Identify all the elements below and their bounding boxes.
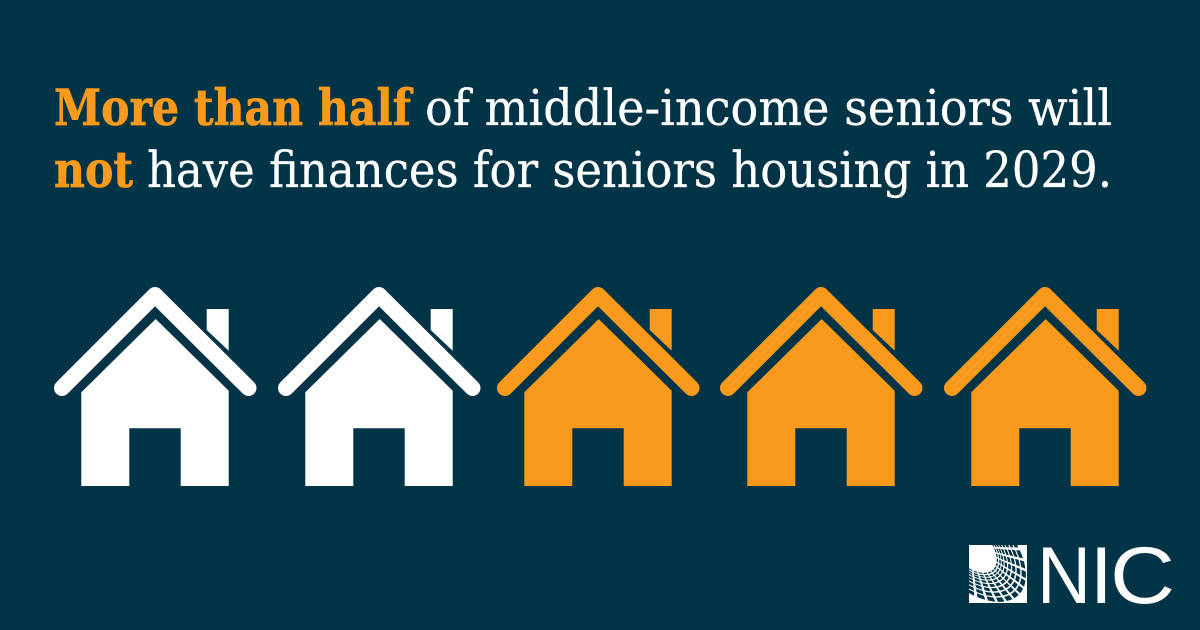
title: not (54, 140, 133, 199)
logo: NIC (969, 545, 1172, 604)
icon: house 2 white (286, 295, 472, 486)
logo wordmark: C (1110, 531, 1175, 621)
title (54, 78, 1112, 199)
title: have finances for seniors housing in 2029. (147, 141, 1112, 199)
icon: house 4 orange (728, 295, 914, 486)
icon: house 5 orange (952, 295, 1138, 486)
icon: house 1 white (62, 295, 248, 486)
title: of middle-income seniors will (425, 79, 1112, 137)
logo mark: square with fan grid (969, 545, 1027, 603)
logo wordmark: I (1090, 531, 1113, 621)
title: More than half (54, 78, 414, 137)
logo wordmark: N (1037, 531, 1091, 621)
icon: house 3 orange (505, 295, 692, 486)
logo wordmark (1037, 531, 1175, 621)
